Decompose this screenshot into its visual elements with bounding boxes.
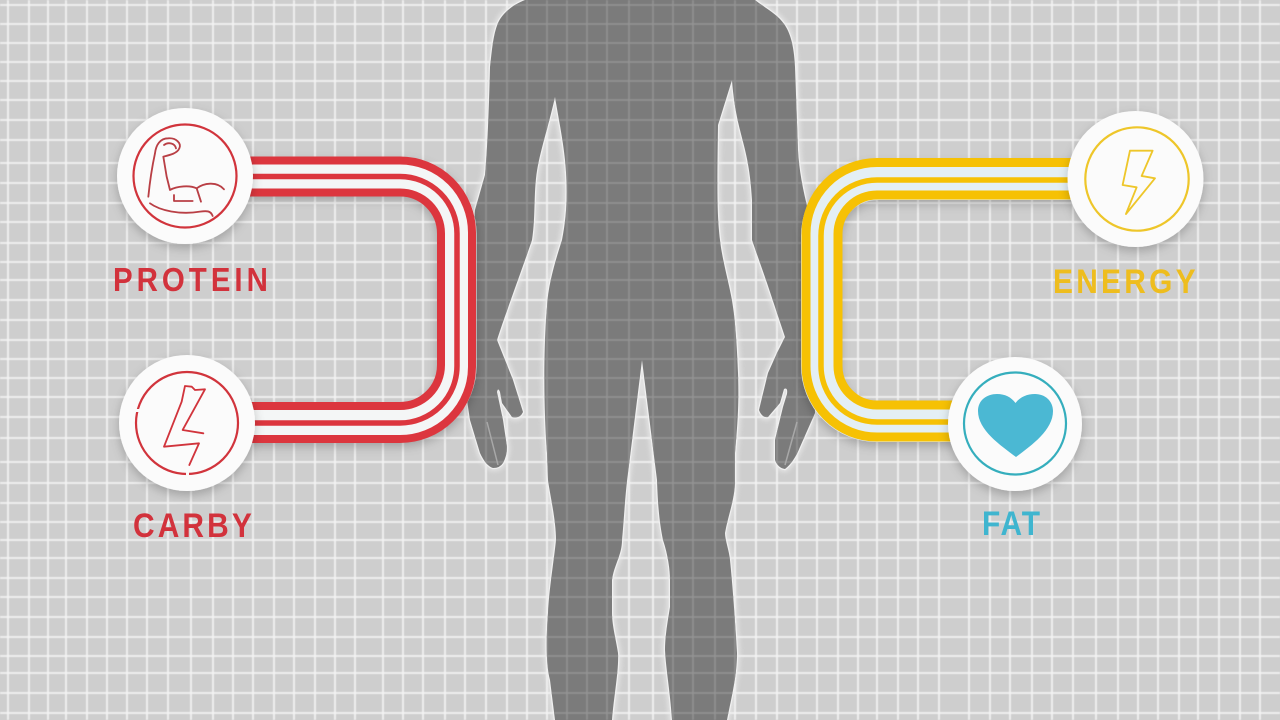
badge: carby <box>119 355 255 491</box>
label: energy: ENERGY <box>1053 262 1196 300</box>
label: carby: CARBY <box>133 506 252 544</box>
body silhouette <box>466 0 816 720</box>
icon: lightning bolt <box>1123 151 1155 214</box>
badge: fat <box>948 357 1082 491</box>
badge: energy <box>1068 111 1204 247</box>
icon: flexed arm <box>148 138 224 216</box>
connector: red pipes <box>250 160 472 439</box>
connector: yellow pipes <box>806 162 1075 437</box>
badge: protein <box>117 108 253 244</box>
label: fat: FAT <box>982 504 1040 542</box>
label: protein: PROTEIN <box>113 260 268 298</box>
icon: heart <box>978 394 1053 457</box>
icon: lightning glyph <box>164 386 205 465</box>
